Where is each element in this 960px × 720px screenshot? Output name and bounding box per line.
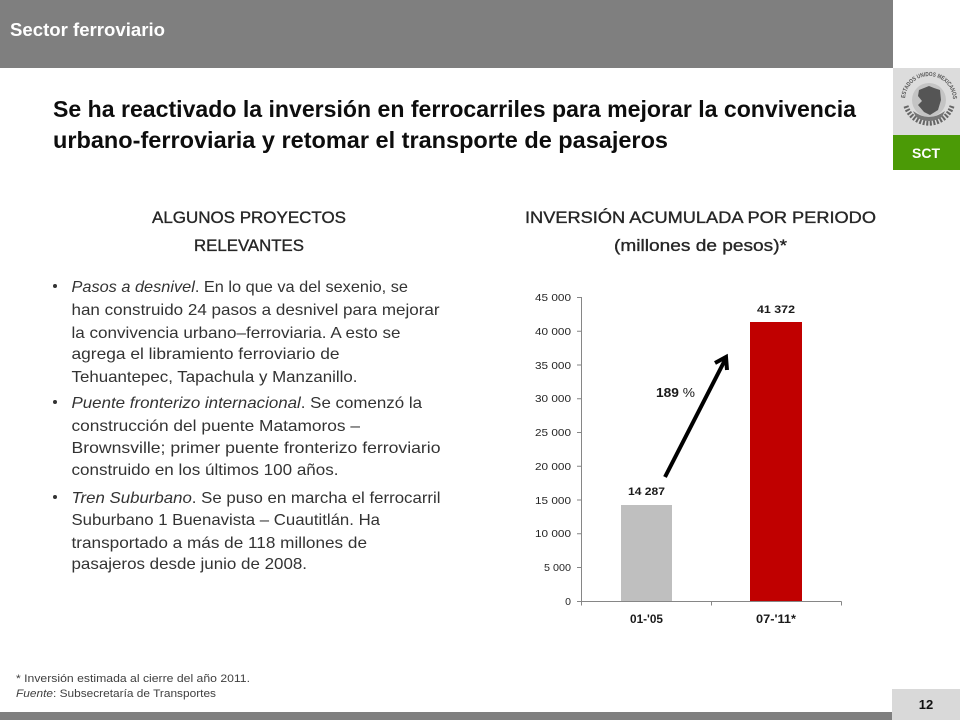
logo panel: emblem and SCT: SCT: [912, 145, 940, 161]
heading: algunos proyectos relevantes: ALGUNOS PROYECTOS: [152, 208, 346, 227]
y axis and labels: 45 000: [535, 292, 571, 304]
heading: inversión acumulada: INVERSIÓN ACUMULADA POR PERIODO: [525, 208, 876, 227]
bar: 01-'05: 01-'05: [630, 614, 664, 626]
title: urbano-ferroviaria y retomar el transporte de pasajeros: [53, 127, 668, 153]
bullet: pasos a desnivel: han construido 24 pasos a desnivel para mejorar: [72, 302, 440, 319]
heading: algunos proyectos relevantes: [152, 208, 346, 255]
footnote: Fuente: Subsecretaría de Transportes: [16, 688, 217, 700]
page number: 12: [919, 697, 933, 712]
footer band: [0, 712, 892, 720]
y axis and labels: 30 000: [535, 393, 571, 405]
footnote: [16, 673, 250, 700]
header band: [0, 0, 893, 68]
bullet: puente fronterizo: construido en los últimos 100 años.: [72, 462, 338, 479]
bullet: tren suburbano: Suburbano 1 Buenavista – Cuautitlán. Ha: [72, 512, 380, 529]
y axis and labels: 40 000: [535, 326, 571, 338]
y axis and labels: 20 000: [535, 461, 571, 473]
bullet: pasos a desnivel: agrega el libramiento ferroviario de: [72, 346, 340, 363]
heading: algunos proyectos relevantes: RELEVANTES: [194, 236, 304, 255]
heading: inversión acumulada: [525, 208, 876, 255]
bar: 01-'05: 14 287: [628, 486, 665, 498]
y axis and labels: 0: [565, 596, 571, 608]
page number: [892, 689, 960, 720]
bar: 07-'11*: 07-'11*: [756, 614, 797, 626]
y axis and labels: 15 000: [535, 495, 571, 507]
y axis and labels: 25 000: [535, 427, 571, 439]
y axis and labels: 35 000: [535, 360, 571, 372]
bullet: pasos a desnivel: [53, 279, 440, 386]
text block: project list: [53, 279, 441, 573]
header band: Sector ferroviario: [10, 20, 165, 40]
footnote: * Inversión estimada al cierre del año 2011.: [16, 673, 250, 685]
bullet: pasos a desnivel: Tehuantepec, Tapachula y Manzanillo.: [72, 369, 358, 386]
bullet: tren suburbano: Tren Suburbano . Se puso en marcha el ferrocarril: [72, 490, 440, 507]
y axis and labels: 10 000: [535, 528, 571, 540]
bar chart: [535, 292, 842, 626]
bullet: puente fronterizo: [53, 395, 441, 479]
y axis and labels: [535, 292, 842, 608]
bullet: pasos a desnivel: la convivencia urbano–ferroviaria. A esto se: [72, 325, 401, 342]
bullet: puente fronterizo: construcción del puente Matamoros –: [72, 418, 360, 435]
bullet: puente fronterizo: Puente fronterizo internacional . Se comenzó la: [72, 395, 422, 412]
y axis and labels: 5 000: [544, 562, 571, 574]
callout: 189 %: 189 %: [656, 385, 695, 400]
title: [53, 96, 856, 153]
bullet: tren suburbano: transportado a más de 118 millones de: [72, 535, 367, 552]
arrow: growth: [665, 357, 727, 477]
bar: 07-'11*: [750, 304, 802, 626]
bullet: puente fronterizo: Brownsville; primer puente fronterizo ferroviario: [72, 440, 441, 457]
logo panel: emblem and SCT: [893, 68, 960, 170]
bullet: pasos a desnivel: Pasos a desnivel. En lo que va del sexenio, se: [72, 279, 408, 296]
bullet: tren suburbano: [53, 490, 440, 573]
title: Se ha reactivado la inversión en ferrocarriles para mejorar la convivencia: [53, 96, 856, 122]
heading: inversión acumulada: (millones de pesos)*: [614, 236, 787, 255]
icon: national emblem: ESTADOS UNIDOS MEXICANOS: [901, 72, 958, 99]
bar: 07-'11*: 41 372: [757, 304, 795, 316]
bar: 01-'05: [621, 486, 672, 626]
bullet: tren suburbano: pasajeros desde junio de 2008.: [72, 556, 307, 573]
